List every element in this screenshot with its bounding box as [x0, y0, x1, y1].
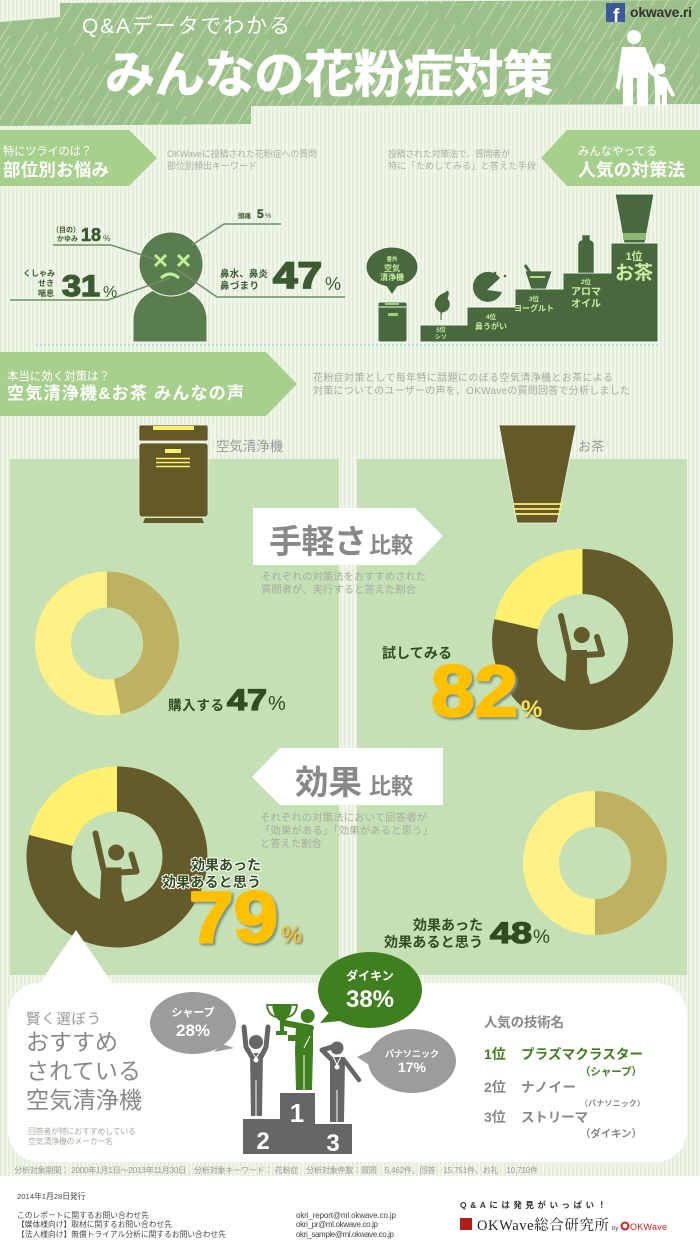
stat: effective 48%: 48	[490, 917, 532, 950]
stat: try 82%	[382, 645, 542, 732]
heading: effect comparison: 比較	[369, 774, 413, 799]
bubble: panasonic 17%: 17%	[398, 1059, 427, 1075]
ease description	[261, 570, 426, 596]
panel: air purifier	[10, 459, 339, 975]
bubble: sharp 28%: 28%	[176, 1021, 210, 1040]
stat: runny nose 47%: 鼻水、鼻炎	[220, 268, 268, 280]
chart: remedy stairs	[366, 194, 658, 342]
stat: itchy eyes 18%: 18	[81, 225, 101, 245]
footer: logo	[460, 1200, 667, 1234]
bubble: sharp 28%	[150, 992, 236, 1054]
stair labels: アロマ	[571, 286, 601, 298]
effect description: 「効果がある」「効果があると思う」	[260, 824, 433, 837]
icon: facebook	[606, 3, 625, 27]
figure: winner with trophy	[267, 1004, 315, 1090]
footer: logo: Q&Aには発見がいっぱい！	[460, 1200, 606, 1210]
bubble: daikin 38%	[318, 952, 422, 1028]
recommendation note	[28, 1126, 136, 1146]
stair labels: 4位	[486, 312, 497, 321]
list: popular technology names: （パナソニック）	[580, 1098, 645, 1108]
stat: runny nose 47%	[220, 255, 341, 296]
footer: contact information: 【媒体様向け】取材に関するお問い合わせ先	[17, 1219, 172, 1229]
header banner	[0, 0, 700, 126]
stat: sneezing 31%: 31	[62, 270, 100, 303]
facebook account name: okwave.ri	[630, 4, 692, 20]
icon: small air purifier with bubble: 空気	[384, 263, 400, 273]
list: popular technology names: （シャープ）	[580, 1065, 642, 1078]
icon: trophy	[267, 1004, 297, 1035]
recommendation heading	[26, 1011, 142, 1113]
stat: headache 5%: %	[265, 213, 271, 220]
panel: recommended air purifiers	[8, 930, 687, 1162]
dotted divider	[36, 344, 660, 346]
stat: purchase 47%: %	[268, 693, 286, 715]
footer: contact information: 2014年1月28日発行	[17, 1191, 86, 1201]
icon: cheering person 2	[96, 834, 136, 908]
stair labels	[435, 249, 653, 341]
main title: みんなの花粉症対策	[105, 47, 553, 103]
figure: third place	[322, 1042, 359, 1122]
analysis scope note: 分析対象期間： 2000年1月1日～2013年11月30日 分析対象キーワード： 花粉症 分析対象件数：質問 5,462件、回答 15,751件、お礼 10,710件	[14, 1165, 538, 1175]
icon: facebook: f	[613, 6, 620, 27]
stat: effective 79%: 79	[189, 878, 278, 958]
chart: donut tea 82%	[514, 572, 651, 708]
body parts description: 部位別頻出キーワード	[167, 160, 257, 171]
stat: purchase 47%: 購入する	[168, 697, 224, 713]
list: popular technology names: 3位	[484, 1109, 506, 1125]
stat: runny nose 47%: %	[325, 274, 341, 294]
remedies description: 投稿された対策法で、質問者が	[388, 148, 510, 159]
chart: donut purifier 48%	[541, 809, 649, 917]
list: popular technology names	[484, 1014, 645, 1140]
section ribbon: body parts: 特にツライのは？	[3, 144, 92, 158]
stat: purchase 47%: 47	[227, 684, 267, 717]
heading: ease comparison	[253, 508, 443, 565]
recommendation note: 回答者が特におすすめしている	[28, 1126, 136, 1136]
stat: sneezing 31%: くしゃみ	[23, 269, 55, 278]
podium: 1	[290, 1098, 304, 1128]
remedies description: 特に「ためしてみる」と答えた手段	[388, 160, 536, 171]
stair labels: シソ	[435, 334, 447, 341]
bubble: daikin 38%: 38%	[346, 986, 394, 1013]
recommendation note: 空気清浄機のメーカー名	[28, 1136, 113, 1146]
icon: small air purifier with bubble: 清浄機	[380, 272, 404, 282]
stat: itchy eyes 18%: %	[103, 233, 111, 243]
icon: shiso leaf	[435, 291, 449, 320]
stair labels: お茶	[615, 262, 653, 284]
label: air purifier: 空気清浄機	[216, 439, 283, 454]
section ribbon: popular remedies	[541, 130, 700, 186]
footer: contact information	[17, 1191, 226, 1239]
stat: runny nose 47%: 47	[273, 255, 322, 296]
effect description: それぞれの対策法において回答者が	[260, 811, 428, 824]
stat: sneezing 31%: %	[103, 284, 117, 301]
icon: aroma bottle	[578, 235, 594, 273]
footer: contact information: このレポートに関するお問い合わせ先	[17, 1210, 149, 1220]
callout lines	[10, 224, 345, 300]
icon: tea cup large	[499, 425, 576, 523]
stat: effective 48%: %	[533, 927, 550, 948]
ease description: 質問者が、実行すると答えた割合	[261, 583, 417, 596]
stat: runny nose 47%: 鼻づまり	[220, 280, 259, 292]
footer: email addresses	[296, 1211, 397, 1239]
footer: email addresses: okri_report@ml.okwave.co.jp	[296, 1211, 397, 1220]
section ribbon: voices: 本当に効く対策は？	[7, 369, 110, 383]
list: popular technology names: 人気の技術名	[484, 1014, 564, 1030]
stair labels: 1位	[625, 249, 643, 263]
remedies description	[388, 148, 536, 171]
list: popular technology names: 1位	[484, 1046, 506, 1062]
footer: logo: by	[612, 1226, 618, 1232]
heading: effect comparison	[252, 748, 443, 805]
footer: logo: OKWave	[630, 1222, 667, 1232]
figure: suffering person	[10, 224, 345, 342]
body parts description: OKWaveに投稿された花粉症への質問	[167, 148, 317, 159]
list: popular technology names: ストリーマ	[521, 1110, 588, 1125]
panel: tea	[357, 459, 687, 975]
section ribbon: body parts	[0, 130, 157, 186]
icon: small air purifier with bubble: 番外	[386, 255, 398, 263]
stair labels: 2位	[581, 277, 592, 286]
stair labels: 5位	[436, 326, 446, 334]
heading: effect comparison: 効果	[295, 765, 362, 802]
footer: email addresses: okri_pr@ml.okwave.co.jp	[296, 1220, 379, 1229]
voices description	[313, 371, 630, 397]
list: popular technology names: 2位	[484, 1079, 506, 1095]
section ribbon: voices: 空気清浄機&お茶 みんなの声	[7, 383, 244, 403]
stair labels: ヨーグルト	[514, 303, 554, 313]
section ribbon: popular remedies: みんなやってる	[578, 145, 657, 158]
podium: 3	[326, 1130, 340, 1157]
stat: headache 5%: 5	[257, 207, 264, 221]
footer: contact information: 【法人様向け】無償トライアル分析に関するお問い合わせ先	[17, 1229, 226, 1239]
list: popular technology names: ナノイー	[521, 1080, 576, 1095]
stat: effective 79%: %	[281, 922, 302, 949]
stat: sneezing 31%: せき	[38, 279, 54, 288]
stat: itchy eyes 18%	[52, 225, 111, 245]
voices description: 対策についてのユーザーの声を、OKWaveの質問回答で分析しました	[313, 384, 630, 397]
stat: itchy eyes 18%: （目の）	[52, 226, 80, 234]
figure: second place	[244, 1027, 268, 1116]
stat: headache 5%: 頭痛	[238, 211, 252, 220]
recommendation heading: されている	[26, 1058, 141, 1084]
stat: try 82%: 82	[431, 652, 518, 732]
stat: effective 79%: 効果あった	[191, 857, 261, 873]
stat: try 82%: %	[521, 696, 542, 723]
effect description: と答えた割合	[260, 837, 322, 850]
recommendation heading: 空気清浄機	[26, 1087, 142, 1113]
stair labels: 3位	[529, 294, 540, 303]
stat: effective 48%	[384, 917, 550, 950]
stat: headache 5%	[238, 207, 271, 221]
stat: effective 48%: 効果あると思う	[384, 934, 483, 950]
icon: tea cup	[615, 194, 654, 243]
bubble: panasonic 17%	[357, 1029, 456, 1093]
footer: logo: OKWave総合研究所	[477, 1217, 610, 1234]
stat: purchase 47%	[168, 684, 286, 717]
icon: mortar yogurt	[525, 265, 552, 289]
heading: ease comparison: 比較	[369, 533, 413, 558]
section ribbon: voices	[0, 352, 297, 416]
voices description: 花粉症対策として毎年特に話題にのぼる空気清浄機とお茶による	[313, 371, 613, 384]
chart: donut purifier 47%	[53, 590, 161, 698]
stat: effective 79%: 効果あると思う	[162, 874, 261, 890]
body parts description	[167, 148, 317, 171]
list: popular technology names: （ダイキン）	[580, 1127, 642, 1140]
footer: email addresses: okri_sample@ml.okwave.co.jp	[296, 1230, 395, 1239]
heading: ease comparison: 手軽さ	[269, 523, 367, 560]
bubble: sharp 28%: シャープ	[171, 1006, 215, 1019]
ease description: それぞれの対策法をおすすめされた	[261, 570, 426, 583]
section ribbon: popular remedies: 人気の対策法	[578, 160, 685, 180]
podium	[243, 1093, 352, 1157]
icon: nose gargle	[473, 272, 506, 302]
chart: donut tea 79%	[49, 789, 185, 925]
icon: cheering person	[561, 616, 602, 690]
recommendation heading: 賢く選ぼう	[26, 1011, 101, 1028]
stat: sneezing 31%	[23, 269, 117, 303]
podium: 2	[256, 1128, 270, 1155]
bubble: daikin 38%: ダイキン	[346, 968, 394, 983]
list: popular technology names: プラズマクラスター	[521, 1046, 643, 1062]
stat: effective 79%	[162, 857, 302, 958]
recommendation heading: おすすめ	[26, 1029, 118, 1055]
bubble: panasonic 17%: パナソニック	[385, 1049, 439, 1059]
stat: itchy eyes 18%: かゆみ	[57, 235, 78, 243]
stat: sneezing 31%: 喘息	[38, 288, 54, 298]
stat: try 82%: 試してみる	[382, 645, 452, 661]
icon: air purifier	[139, 425, 208, 523]
section ribbon: body parts: 部位別お悩み	[3, 160, 109, 180]
stair labels: 鼻うがい	[475, 321, 507, 331]
stat: effective 48%: 効果あった	[413, 917, 483, 933]
effect description	[260, 811, 433, 850]
icon: parent and child	[616, 30, 675, 106]
icon: small air purifier with bubble	[366, 247, 418, 342]
header subtitle: Q&Aデータでわかる	[82, 15, 290, 38]
label: tea: お茶	[578, 439, 604, 454]
stair labels: オイル	[571, 298, 601, 310]
